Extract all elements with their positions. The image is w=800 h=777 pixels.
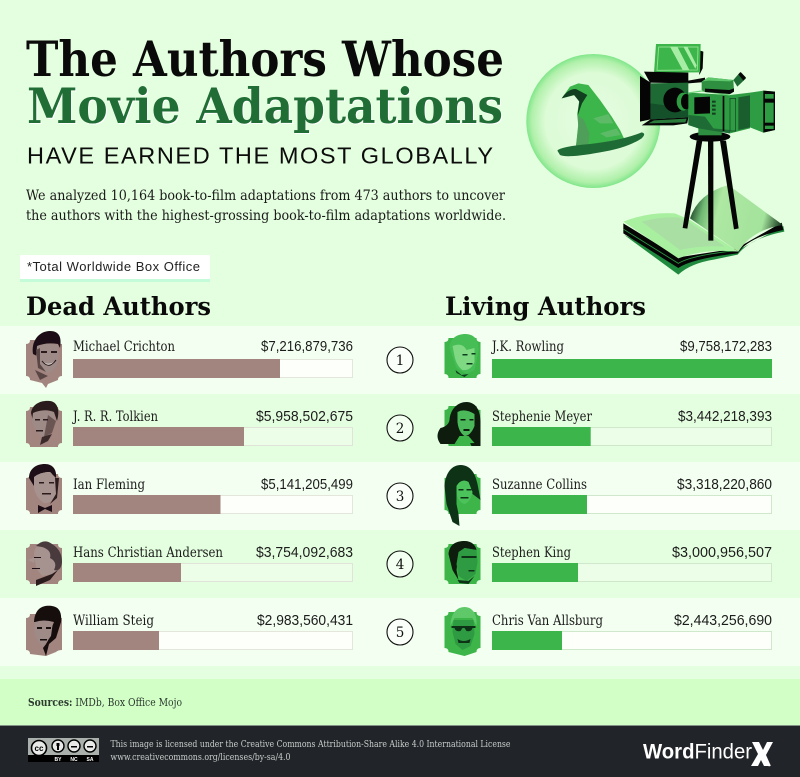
icon: tripod: [683, 141, 739, 241]
row: Chris Van Allsburg: [444, 607, 772, 656]
rank 5: 5: [396, 625, 404, 641]
row: William Steig: [26, 606, 353, 656]
subtitle: HAVE EARNED THE MOST GLOBALLY: [27, 142, 493, 168]
row: J.K. Rowling: [444, 334, 772, 378]
illustration: film camera, wizard hat and open book: [526, 44, 784, 275]
heading: dead authors: Dead Authors: [26, 292, 211, 321]
intro text: the authors with the highest-grossing book-to-film adaptations worldwide.: [26, 208, 506, 224]
row: J.K. Rowling: $9,758,172,283: [680, 339, 772, 355]
portrait: J. R. R. Tolkien: [26, 401, 62, 447]
row: Michael Crichton: $7,216,879,736: [261, 339, 353, 355]
icon: creative commons badge: BY: [55, 757, 62, 763]
row: Michael Crichton: [26, 331, 353, 388]
rank 4: [387, 551, 413, 577]
icon: creative commons badge: NC: [70, 757, 78, 763]
name and value: J.K. Rowling: [490, 339, 564, 355]
title: The Authors Whose: [26, 30, 504, 88]
logo: WordFinderX: WordFinder: [643, 740, 752, 764]
row: J. R. R. Tolkien: [26, 401, 353, 447]
row: Stephenie Meyer: [438, 402, 772, 446]
name and value: Chris Van Allsburg: [492, 613, 603, 629]
portrait: Suzanne Collins: [444, 465, 480, 526]
heading: living authors: Living Authors: [445, 292, 646, 321]
name and value: Michael Crichton: [73, 339, 175, 355]
icon: wizard hat: [557, 83, 644, 156]
row: Suzanne Collins: [444, 465, 772, 526]
rank 4: 4: [396, 557, 404, 573]
portrait: Hans Christian Andersen: [26, 541, 62, 586]
portrait: Michael Crichton: [26, 331, 62, 388]
intro text: [26, 188, 506, 224]
portrait: Ian Fleming: [26, 464, 62, 514]
title: Movie Adaptations: [28, 78, 504, 136]
portrait: Chris Van Allsburg: [444, 607, 480, 656]
row: Hans Christian Andersen: $3,754,092,683: [256, 545, 353, 561]
panel: dead authors ranking: [26, 331, 353, 656]
title: Movie Adaptations: [27, 77, 503, 135]
rank 3: 3: [396, 489, 404, 505]
rank 1: [387, 347, 413, 373]
name and value: Hans Christian Andersen: [73, 545, 223, 561]
icon: open book: [623, 185, 784, 275]
row: Hans Christian Andersen: [26, 541, 353, 586]
row: Stephen King: [444, 541, 772, 584]
name and value: Stephen King: [492, 545, 571, 561]
row: Suzanne Collins: $3,318,220,860: [677, 477, 772, 493]
icon: glowing circle: [526, 54, 660, 188]
rank badges: [387, 347, 413, 645]
note: total worldwide box office: [20, 255, 210, 282]
bar: [73, 631, 352, 650]
panel: living authors ranking: [438, 334, 772, 656]
license text: This image is licensed under the Creative Commons Attribution-Share Alike 4.0 International License: [110, 740, 510, 750]
row: Ian Fleming: [26, 464, 353, 514]
row: Ian Fleming: $5,141,205,499: [261, 477, 353, 493]
row bands: [0, 326, 800, 666]
bar: [73, 563, 352, 582]
icon: film camera: [640, 44, 775, 142]
name and value: William Steig: [73, 613, 154, 629]
portrait: Stephenie Meyer: [438, 402, 480, 446]
name and value: Stephenie Meyer: [492, 409, 592, 425]
rank 2: 2: [396, 421, 404, 437]
row: J. R. R. Tolkien: $5,958,502,675: [256, 409, 353, 425]
row: Stephenie Meyer: $3,442,218,393: [678, 409, 772, 425]
rank 1: 1: [396, 353, 404, 369]
bar: [73, 359, 352, 378]
portrait: J.K. Rowling: [444, 334, 480, 378]
row: Chris Van Allsburg: $2,443,256,690: [674, 613, 772, 629]
footer: [0, 726, 800, 777]
portrait: Stephen King: [444, 541, 480, 584]
name and value: Suzanne Collins: [492, 477, 587, 493]
rank 3: [387, 483, 413, 509]
icon: creative commons badge: cc: [35, 744, 44, 753]
bar: [73, 427, 352, 446]
rank 5: [387, 619, 413, 645]
rank 2: [387, 415, 413, 441]
sources panel: Sources: IMDb, Box Office Mojo: [28, 696, 182, 709]
name and value: Ian Fleming: [73, 477, 145, 493]
bar: [492, 631, 772, 650]
intro text: We analyzed 10,164 book-to-film adaptations from 473 authors to uncover: [26, 188, 505, 204]
license text: www.creativecommons.org/licenses/by-sa/4.0: [110, 753, 291, 763]
row: William Steig: $2,983,560,431: [257, 613, 353, 629]
icon: creative commons badge: SA: [87, 757, 94, 763]
portrait: William Steig: [26, 606, 62, 656]
sources panel: [0, 679, 800, 725]
icon: creative commons badge: [28, 738, 99, 763]
bar: [492, 427, 772, 446]
row: Stephen King: $3,000,956,507: [672, 545, 772, 561]
note: total worldwide box office: *Total Worldwide Box Office: [27, 259, 200, 274]
bar: [73, 495, 352, 514]
bar: [492, 495, 772, 514]
license text: [110, 740, 510, 763]
bar: [492, 563, 772, 582]
name and value: J. R. R. Tolkien: [71, 409, 158, 425]
title: [26, 30, 504, 136]
bar: [492, 359, 772, 378]
